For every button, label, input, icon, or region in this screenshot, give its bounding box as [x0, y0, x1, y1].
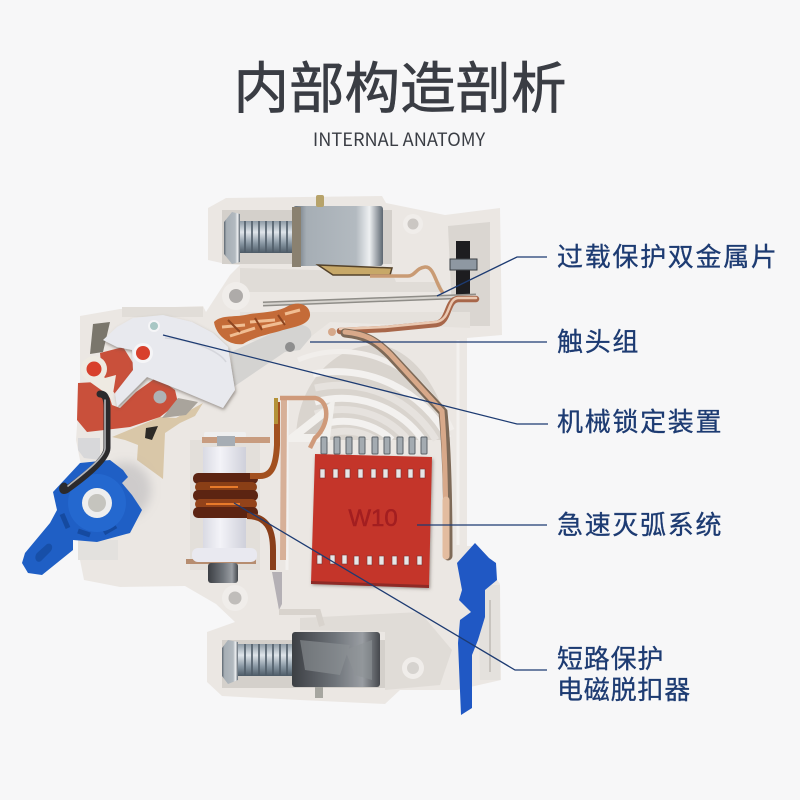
- subtitle: INTERNAL ANATOMY: [313, 126, 485, 152]
- arc chamber ribs: [292, 345, 452, 440]
- label: short-circuit electromagnetic release: 短路保护: [557, 644, 664, 674]
- leader line: short circuit coil: [234, 503, 547, 670]
- circuit breaker cutaway illustration: [22, 195, 502, 715]
- spring: [90, 322, 110, 354]
- icon: mounting holes: [222, 214, 424, 679]
- icon: blue toggle knob: [22, 438, 151, 575]
- panel: trip mechanism: [77, 315, 235, 479]
- red lever: [77, 377, 178, 432]
- slots: [317, 469, 425, 565]
- bottom terminal screw and clamp: [222, 632, 380, 698]
- silver blade and copper braid: [214, 304, 311, 388]
- panel: electromagnetic trip coil: [186, 398, 326, 626]
- overload bimetal strip and black screw: [263, 241, 477, 304]
- roller: [81, 356, 107, 382]
- label: short-circuit electromagnetic release: 电磁脱扣器: [557, 675, 691, 705]
- panel: breaker housing: [76, 196, 502, 704]
- leader line: overload bimetal: [437, 257, 547, 296]
- leader line: contact group: [310, 341, 547, 343]
- label: mechanical lock: 机械锁定装置: [557, 407, 723, 437]
- copper winding: [193, 473, 258, 518]
- beige latch: [112, 403, 203, 479]
- label: rapid arc extinguishing: 急速灭弧系统: [557, 510, 723, 540]
- label: overload bimetal: 过载保护双金属片: [557, 242, 779, 272]
- panel: red arc extinguishing stack: [311, 437, 432, 588]
- white latch plate: [103, 315, 235, 408]
- top terminal screw and clamp: [224, 195, 443, 293]
- title: 内部构造剖析: [233, 58, 567, 120]
- leader line: arc extinguishing: [417, 524, 547, 526]
- contact arm: [328, 298, 476, 556]
- arc plate tabs: [321, 437, 427, 454]
- leader line: mechanical lock: [163, 335, 548, 424]
- icon: blue din-rail clip: [457, 543, 497, 715]
- label: contact group: 触头组: [557, 327, 640, 357]
- W10 mark: W10: [348, 505, 398, 532]
- wire link: [63, 394, 107, 491]
